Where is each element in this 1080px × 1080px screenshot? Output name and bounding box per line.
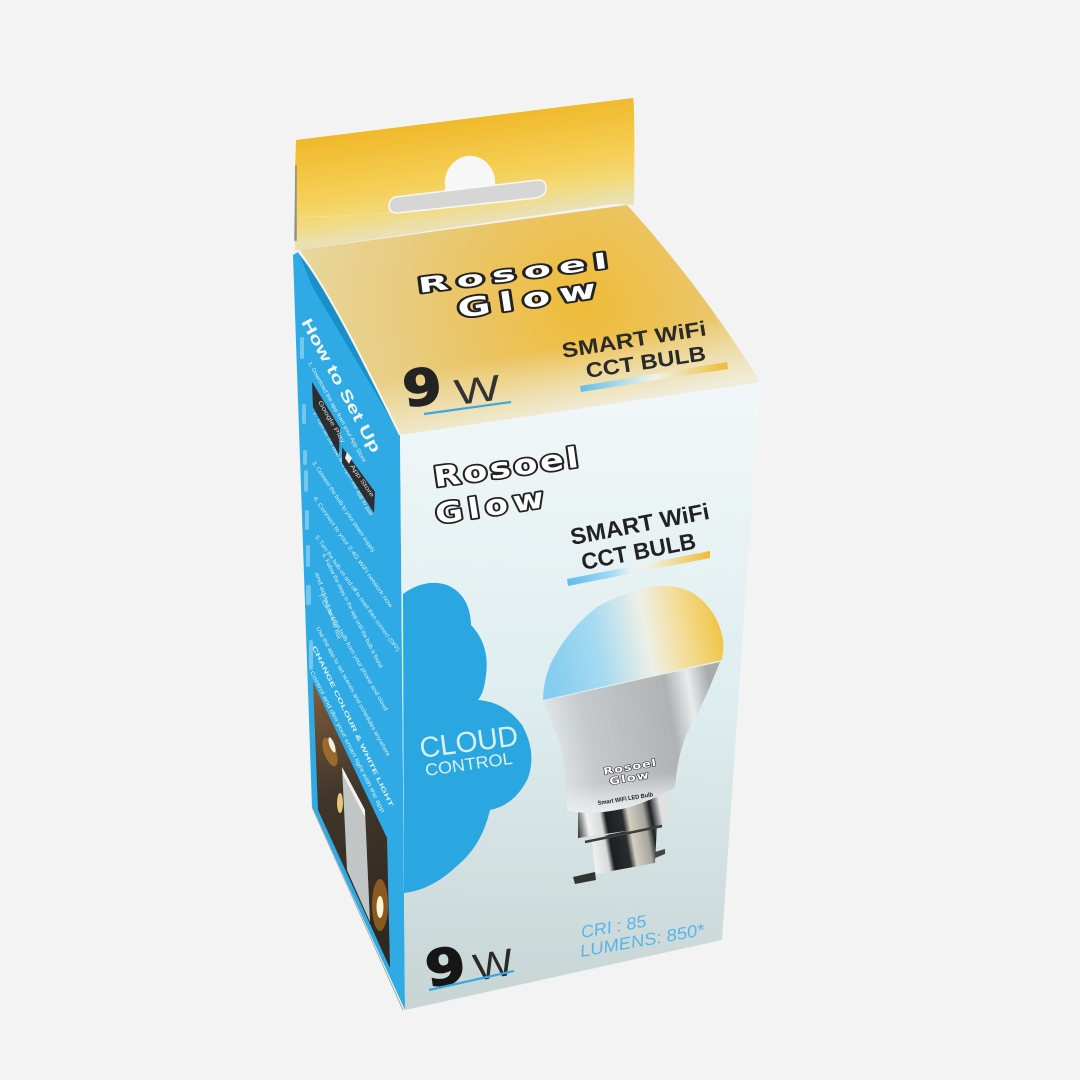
product name: CCT BULB xyxy=(579,528,698,575)
product name xyxy=(568,498,711,575)
setup instructions text: 3. Connect the bulb to your power supply xyxy=(310,461,376,554)
bulb logo: Rosoel xyxy=(602,756,658,778)
product name: SMART WiFi xyxy=(568,498,711,550)
wattage: 9 xyxy=(399,356,445,419)
app store badges: Google Play xyxy=(316,400,345,445)
bulb logo: Glow xyxy=(608,768,651,788)
setup instructions text: 7. Control the bulb from your phone and cloud xyxy=(316,593,388,712)
setup instructions text: 4. Connect to your 2.4G WiFi network now xyxy=(311,496,394,610)
wattage xyxy=(399,356,511,419)
gradient underline xyxy=(580,362,728,392)
wattage: W xyxy=(470,942,517,990)
hang hole xyxy=(445,156,495,196)
cloud shape: CONTROL xyxy=(424,749,514,780)
logo: Rosoel Glow: Glow xyxy=(433,481,551,531)
logo: Rosoel Glow: Rosoel xyxy=(416,247,617,298)
heading: how to set up: How to Set Up xyxy=(297,316,384,456)
bulb caption: Smart WiFi LED Bulb xyxy=(597,792,654,807)
product name: CCT BULB xyxy=(584,342,707,383)
logo: Rosoel Glow xyxy=(416,247,617,324)
setup instructions text: 1. Download the app from your App Store xyxy=(306,361,367,464)
product name: SMART WiFi xyxy=(560,317,708,363)
bulb base xyxy=(573,795,667,884)
cloud control label: CLOUD xyxy=(418,720,520,765)
wattage: W xyxy=(452,367,503,413)
side icons column xyxy=(300,337,313,670)
bulb xyxy=(543,586,723,884)
gradient underline xyxy=(567,551,710,586)
top flap xyxy=(299,205,760,435)
specs: CRI : 85 xyxy=(579,912,648,942)
hang slot xyxy=(389,180,546,213)
cloud shape xyxy=(403,583,531,893)
hang tab xyxy=(295,98,634,250)
product name xyxy=(560,317,708,383)
room photo with phone xyxy=(313,682,390,968)
setup instructions text: CHANGE COLOUR & WHITE LIGHT xyxy=(310,645,394,808)
setup instructions text: Control and dim your smart light with the app xyxy=(308,670,385,814)
front panel xyxy=(400,382,760,1010)
specs: LUMENS: 850* xyxy=(578,920,707,961)
setup instructions text: and added to the list xyxy=(313,572,342,640)
logo: Rosoel Glow xyxy=(432,442,583,531)
app store badges: App Store xyxy=(348,464,375,499)
wattage: 9 xyxy=(422,935,469,999)
wattage xyxy=(422,935,517,999)
setup instructions text: 5. Turn the bulb on and off to reset then connect (OFF) xyxy=(313,535,400,653)
bulb logo xyxy=(602,756,658,788)
logo: Rosoel Glow: Rosoel xyxy=(432,442,583,494)
setup instructions text xyxy=(306,361,400,814)
setup instructions text: 6. Follow the steps in the app until the bulb is found xyxy=(320,553,383,669)
side panel xyxy=(293,252,405,1010)
setup instructions text: Use the app to set scenes and schedules anywhere xyxy=(314,626,391,758)
setup instructions text: 2. Turn on the bulb and open the app to pair xyxy=(311,411,374,517)
app store badges xyxy=(312,382,375,513)
logo: Rosoel Glow: Glow xyxy=(455,272,607,324)
